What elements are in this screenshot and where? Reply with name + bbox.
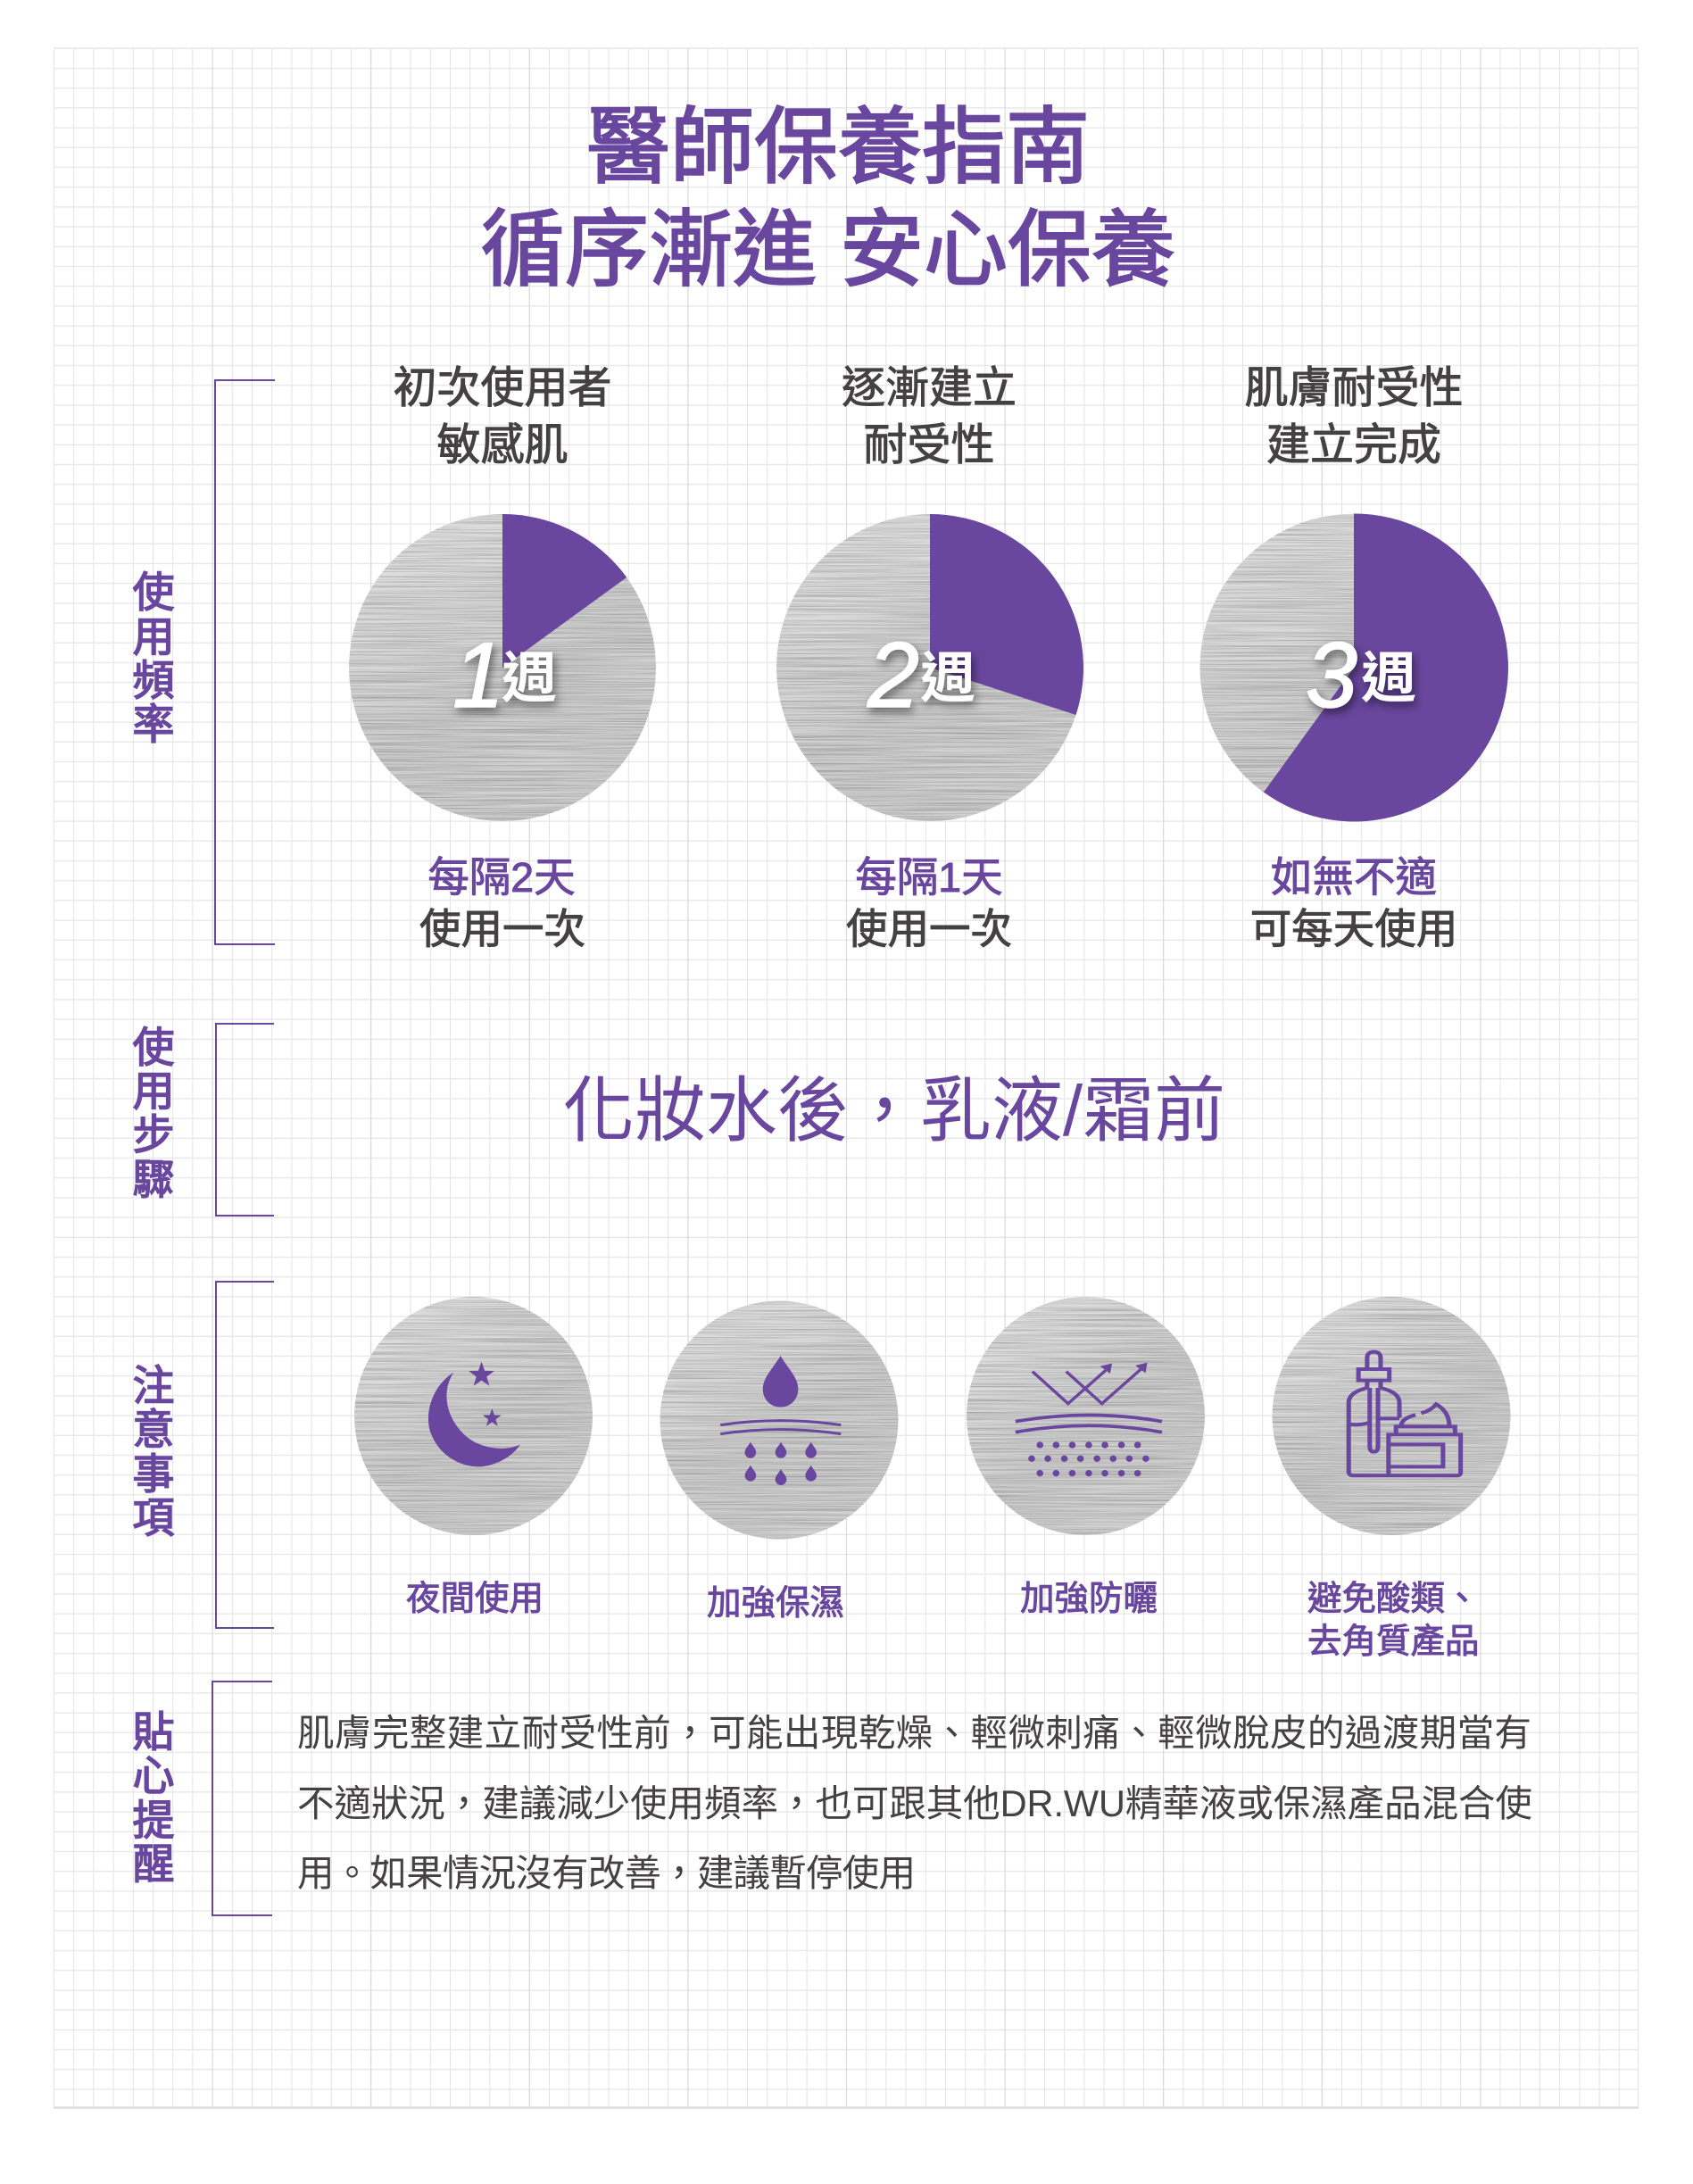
pie: 2 weeks: [776, 514, 1083, 821]
pie: 1 week: [349, 514, 656, 821]
caption: every 1 day: [846, 854, 1012, 952]
label: 注意事項: 注: [132, 1362, 175, 1409]
title: 循序漸進 安心保養: [481, 203, 1175, 296]
label: 使用步驟: 使: [132, 1024, 175, 1071]
label: 使用頻率: [132, 569, 175, 748]
label: 注意事項: 意: [132, 1406, 175, 1453]
heading: building tolerance: 逐漸建立: [842, 364, 1017, 412]
label: 使用步驟: [132, 1024, 175, 1203]
icon: sun protection: [967, 1297, 1205, 1535]
reminder paragraph: 肌膚完整建立耐受性前，可能出現乾燥、輕微刺痛、輕微脫皮的過渡期當有: [297, 1712, 1531, 1754]
label: 貼心提醒: 心: [132, 1752, 175, 1799]
label: 使用頻率: 頻: [132, 657, 175, 704]
reminder paragraph: [297, 1712, 1532, 1894]
pie: 2 weeks: 週: [920, 648, 975, 710]
bracket: precautions: [216, 1282, 274, 1628]
label: 注意事項: [132, 1362, 175, 1541]
reminder paragraph: 不適狀況，建議減少使用頻率，也可跟其他DR.WU精華液或保濕產品混合使: [297, 1782, 1532, 1824]
caption: avoid acids and exfoliants: 避免酸類、: [1307, 1580, 1480, 1618]
pie: 3 weeks: 週: [1361, 648, 1416, 710]
caption: every 2 days: [419, 854, 585, 952]
label: 使用步驟: 用: [132, 1067, 175, 1115]
reminder paragraph: 用。如果情況沒有改善，建議暫停使用: [297, 1852, 916, 1894]
icon: moon and stars: [354, 1297, 593, 1535]
heading: building tolerance: [842, 364, 1017, 469]
section: reminders: [132, 1682, 1532, 1915]
label: 使用頻率: 率: [132, 701, 175, 748]
label: 貼心提醒: 貼: [132, 1708, 175, 1756]
caption: daily if no discomfort: [1250, 854, 1457, 952]
bracket: frequency: [215, 380, 275, 944]
column: week 2: [776, 364, 1083, 952]
label: 注意事項: 事: [132, 1450, 175, 1498]
label: 貼心提醒: 提: [132, 1797, 175, 1844]
heading: first-time users: 敏感肌: [436, 421, 568, 469]
heading: first-time users: [393, 364, 612, 469]
bracket: reminders: [212, 1682, 272, 1915]
heading: tolerance established: [1244, 364, 1464, 469]
label: 使用頻率: 使: [132, 569, 175, 616]
heading: building tolerance: 耐受性: [863, 421, 995, 469]
label: 貼心提醒: [132, 1708, 175, 1888]
label: 使用步驟: 步: [132, 1111, 175, 1158]
step text: 化妝水後，乳液/霜前: [563, 1071, 1225, 1150]
icon: moisture drops: [660, 1301, 898, 1539]
section: frequency: [132, 364, 1508, 952]
caption: night use: 夜間使用: [406, 1580, 544, 1618]
title: 醫師保養指南: [586, 100, 1090, 194]
section: usage step: [132, 1024, 1225, 1216]
column: week 3: [1199, 364, 1508, 952]
icon: bottle and jar: [1273, 1297, 1510, 1535]
pie: 1 week: 1: [452, 624, 504, 727]
title: [481, 100, 1175, 296]
caption: daily if no discomfort: 如無不適: [1271, 854, 1437, 901]
label: 使用步驟: 驟: [132, 1156, 175, 1203]
caption: every 2 days: 使用一次: [419, 906, 585, 952]
label: 使用頻率: 用: [132, 613, 175, 660]
pie: 3 weeks: 3: [1306, 624, 1357, 727]
column: week 1: [349, 364, 656, 952]
heading: first-time users: 初次使用者: [393, 364, 612, 412]
caption: every 1 day: 使用一次: [846, 906, 1012, 952]
section: precautions: [132, 1282, 1510, 1661]
label: 注意事項: 項: [132, 1494, 175, 1541]
pie: 2 weeks: 2: [867, 624, 919, 727]
caption: more moisturizing: 加強保濕: [707, 1584, 844, 1623]
caption: avoid acids and exfoliants: 去角質產品: [1307, 1623, 1480, 1661]
caption: every 1 day: 每隔1天: [855, 854, 1003, 901]
caption: avoid acids and exfoliants: [1307, 1580, 1480, 1661]
caption: more sun protection: 加強防曬: [1020, 1580, 1158, 1618]
heading: tolerance established: 建立完成: [1266, 421, 1441, 469]
pie: 1 week: 週: [502, 648, 557, 710]
pie: 3 weeks: [1199, 513, 1508, 821]
heading: tolerance established: 肌膚耐受性: [1244, 364, 1464, 412]
bracket: usage step: [216, 1024, 274, 1216]
label: 貼心提醒: 醒: [132, 1840, 175, 1888]
caption: daily if no discomfort: 可每天使用: [1250, 906, 1457, 952]
caption: every 2 days: 每隔2天: [427, 854, 576, 901]
